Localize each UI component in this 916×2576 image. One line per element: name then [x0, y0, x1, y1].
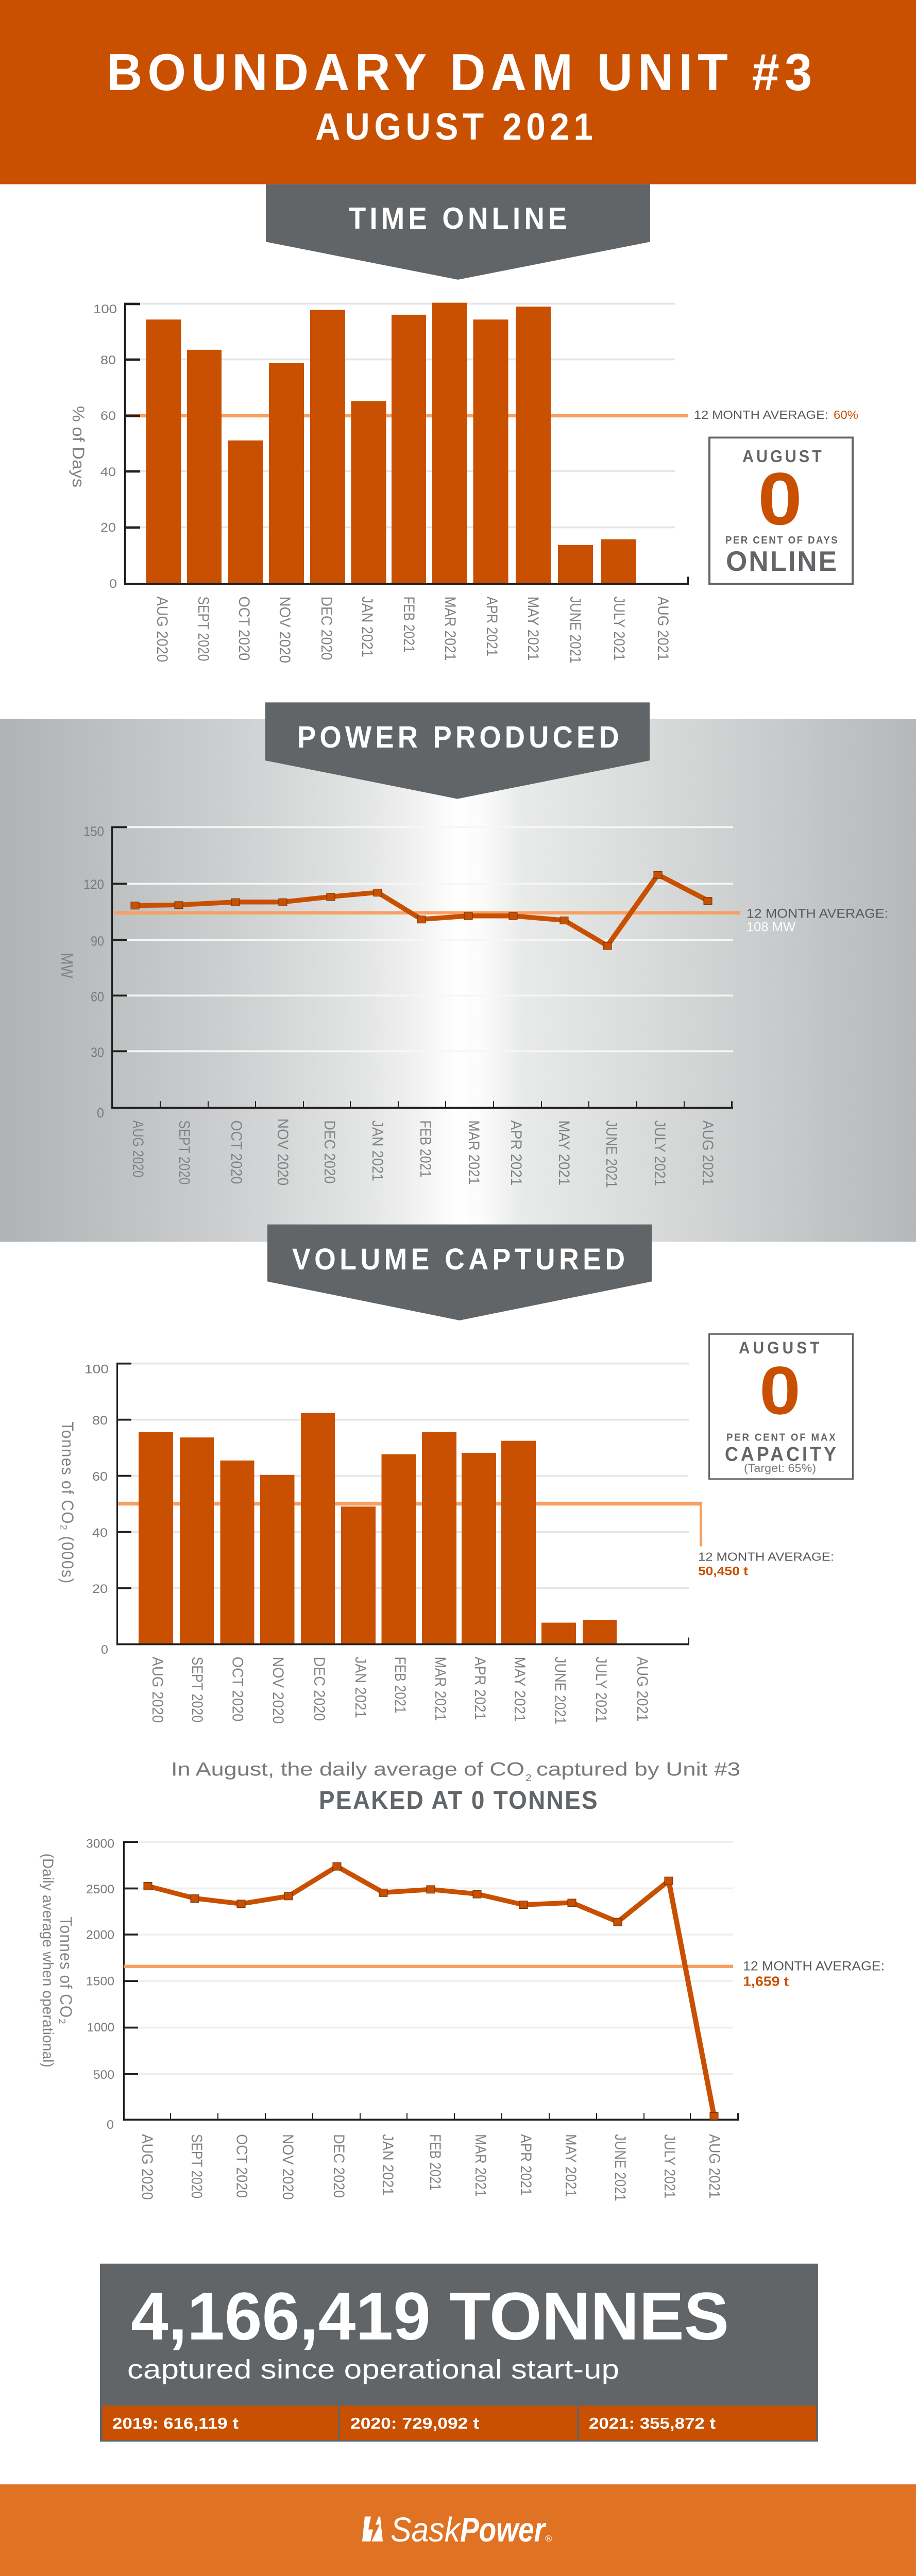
callout: august online: ONLINE: [726, 546, 837, 577]
x axis labels: SEPT 2020: [188, 2134, 205, 2198]
y axis labels: 100: [93, 302, 117, 316]
x axis labels: APR 2021: [517, 2134, 534, 2196]
header band: [0, 0, 916, 184]
callout: august capacity: 0: [759, 1353, 801, 1429]
x axis labels: JUNE 2021: [603, 1121, 620, 1188]
line chart: daily tonnes: [39, 1837, 739, 2201]
x axis labels: JULY 2021: [661, 2134, 678, 2198]
subtitle date: AUGUST 2021: [315, 105, 593, 148]
y axis labels: 60: [100, 409, 116, 423]
x axis labels: NOV 2020: [274, 1118, 291, 1185]
footer band: [0, 2484, 916, 2576]
panel: total tonnes captured: [100, 2264, 818, 2442]
y axis labels: 0: [97, 1106, 104, 1121]
average label: [743, 1959, 885, 1989]
average line: [117, 1502, 702, 1546]
panel: time online: [69, 184, 858, 664]
x axis labels: JAN 2021: [369, 1121, 386, 1181]
x axis labels: APR 2021: [483, 597, 500, 656]
panel: daily average: [39, 1759, 885, 2201]
intro sentence: 2: [525, 1773, 532, 1784]
y axis labels: 30: [91, 1045, 104, 1060]
average label: [698, 1550, 834, 1578]
callout: august capacity: CAPACITY: [725, 1443, 836, 1465]
average label: [747, 906, 888, 934]
average label: 12 MONTH AVERAGE:: [694, 409, 828, 422]
y axis labels: 0: [101, 1643, 108, 1657]
y axis title: Tonnes of CO₂: [57, 1917, 75, 2024]
x axis labels: SEPT 2020: [195, 597, 212, 661]
y axis labels: 2500: [86, 1883, 114, 1896]
x axis labels: JUNE 2021: [567, 597, 584, 664]
x axis labels: AUG 2020: [139, 2134, 156, 2200]
y axis labels: 500: [93, 2068, 114, 2082]
x axis labels: FEB 2021: [417, 1121, 434, 1177]
y axis labels: [84, 1362, 109, 1657]
x axis labels: OCT 2020: [229, 1657, 246, 1721]
heading banner: time online: [266, 184, 650, 280]
bars: [139, 1413, 617, 1644]
x axis labels: JAN 2021: [359, 597, 376, 657]
y axis labels: [83, 824, 104, 1121]
panel: power produced: [0, 702, 916, 1242]
x axis labels: AUG 2021: [654, 597, 671, 660]
average label: 12 MONTH AVERAGE:: [743, 1959, 885, 1974]
axes: [124, 303, 689, 585]
x axis labels: AUG 2020: [129, 1121, 146, 1177]
y axis title: [39, 1854, 75, 2067]
y axis labels: 40: [100, 465, 116, 479]
x axis labels: OCT 2020: [228, 1121, 245, 1184]
x axis labels: JULY 2021: [610, 597, 627, 660]
y axis labels: 2000: [86, 1928, 114, 1942]
y axis labels: 80: [100, 353, 116, 367]
heading banner: volume captured: VOLUME CAPTURED: [292, 1242, 625, 1276]
y axis labels: 3000: [86, 1837, 114, 1851]
x axis labels: OCT 2020: [233, 2134, 250, 2198]
panel: volume captured: [58, 1225, 853, 1724]
x axis labels: JULY 2021: [592, 1657, 609, 1722]
yearly cell: 2019: 2019: 616,119 t: [112, 2414, 239, 2432]
y axis title: (Daily average when operational): [39, 1854, 56, 2067]
bar chart: tonnes of CO2: [58, 1362, 702, 1724]
average line: [125, 414, 688, 417]
x axis labels: AUG 2020: [154, 597, 171, 662]
yearly cell: 2021: 2021: 355,872 t: [589, 2414, 716, 2432]
peak statement: PEAKED AT 0 TONNES: [319, 1786, 598, 1815]
x axis labels: JAN 2021: [379, 2134, 396, 2196]
logo wordmark: Power: [460, 2510, 547, 2549]
y axis labels: 90: [91, 934, 104, 948]
x axis labels: MAY 2021: [511, 1657, 528, 1722]
heading banner: time online: TIME ONLINE: [349, 201, 567, 236]
x axis labels: AUG 2021: [706, 2134, 723, 2198]
x axis labels: MAY 2021: [524, 597, 541, 660]
x axis labels: AUG 2020: [149, 1657, 166, 1723]
x axis labels: APR 2021: [471, 1657, 488, 1720]
x axis labels: SEPT 2020: [176, 1121, 193, 1184]
bars: [146, 303, 636, 583]
x axis labels: SEPT 2020: [189, 1657, 206, 1722]
y axis labels: [93, 302, 117, 591]
line chart: megawatts: [58, 824, 740, 1188]
yearly cell: 2020: [340, 2405, 577, 2440]
x axis labels: AUG 2021: [634, 1657, 651, 1721]
intro sentence: In August, the daily average of CO: [171, 1759, 524, 1780]
y axis labels: [86, 1837, 114, 2132]
total figure: 4,166,419 TONNES: [131, 2278, 729, 2354]
axes and ticks: [123, 1841, 739, 2121]
x axis labels: DEC 2020: [318, 597, 335, 660]
y axis labels: 60: [91, 989, 104, 1004]
y axis labels: 0: [107, 2118, 114, 2132]
data markers: [144, 1862, 718, 2120]
data line: [135, 875, 708, 946]
x axis labels: OCT 2020: [235, 597, 252, 660]
x axis labels: [139, 2134, 723, 2201]
y axis title: Tonnes of CO₂ (000s): [58, 1421, 77, 1583]
total caption: captured since operational start-up: [127, 2354, 619, 2384]
bar chart: per cent of days online: [69, 302, 689, 664]
y axis labels: 100: [84, 1362, 109, 1376]
x axis labels: JUNE 2021: [612, 2134, 629, 2201]
x axis labels: [129, 1118, 716, 1188]
y axis labels: 20: [92, 1582, 108, 1596]
x axis labels: MAY 2021: [562, 2134, 579, 2197]
callout: august online: PER CENT OF DAYS: [725, 534, 838, 546]
data markers: [131, 871, 712, 950]
x axis labels: FEB 2021: [427, 2134, 444, 2191]
x axis labels: MAR 2021: [472, 2134, 489, 2197]
average line: [124, 1965, 733, 1968]
data line: [148, 1867, 714, 2116]
callout: august capacity: PER CENT OF MAX: [726, 1432, 836, 1444]
x axis labels: [154, 597, 671, 664]
x axis labels: AUG 2021: [699, 1121, 716, 1185]
average label: 1,659 t: [743, 1974, 789, 1989]
average label: 12 MONTH AVERAGE:: [698, 1550, 834, 1564]
y axis labels: 40: [92, 1526, 108, 1540]
x axis labels: DEC 2020: [330, 2134, 347, 2198]
intro sentence: captured by Unit #3: [536, 1759, 740, 1780]
y axis labels: 150: [83, 824, 104, 839]
y axis labels: 80: [92, 1414, 108, 1428]
yearly cell: 2019: [102, 2405, 338, 2440]
x axis labels: MAY 2021: [555, 1121, 572, 1185]
average label: 108 MW: [747, 919, 795, 934]
x axis labels: NOV 2020: [269, 1657, 286, 1724]
intro sentence: [171, 1759, 740, 1784]
y axis labels: 0: [109, 577, 117, 591]
x axis labels: JAN 2021: [352, 1657, 369, 1718]
axes: [116, 1363, 689, 1645]
average label: 60%: [834, 409, 858, 422]
heading banner: volume captured: [267, 1225, 652, 1320]
x axis labels: FEB 2021: [392, 1657, 409, 1714]
x axis labels: JUNE 2021: [551, 1657, 568, 1724]
y axis title: % of Days: [69, 406, 88, 487]
heading banner: power produced: [265, 702, 650, 799]
callout: august capacity: (Target: 65%): [744, 1462, 816, 1475]
x axis labels: MAR 2021: [432, 1657, 449, 1721]
callout: august capacity: [709, 1334, 853, 1479]
x axis labels: NOV 2020: [279, 2134, 296, 2200]
x axis labels: MAR 2021: [465, 1121, 482, 1184]
x axis labels: JULY 2021: [651, 1121, 668, 1186]
yearly cell: 2021: [579, 2405, 816, 2440]
x axis labels: DEC 2020: [311, 1657, 328, 1721]
x axis labels: NOV 2020: [276, 597, 293, 663]
x axis labels: APR 2021: [507, 1121, 524, 1185]
x axis labels: MAR 2021: [442, 597, 459, 660]
y axis labels: 20: [100, 521, 116, 535]
x axis labels: DEC 2020: [321, 1121, 338, 1183]
callout: august online: [709, 437, 853, 584]
heading banner: power produced: POWER PRODUCED: [297, 720, 619, 755]
yearly cell: 2020: 2020: 729,092 t: [350, 2414, 479, 2432]
gradient background: [0, 719, 916, 1242]
title: BOUNDARY DAM UNIT #3: [107, 43, 812, 101]
x axis labels: FEB 2021: [400, 597, 417, 653]
y axis labels: 60: [92, 1470, 108, 1484]
logo wordmark: Sask: [391, 2510, 462, 2549]
y axis labels: 120: [83, 877, 104, 892]
y axis labels: 1500: [86, 1974, 114, 1988]
axes and ticks: [111, 826, 733, 1109]
y axis labels: 1000: [87, 2021, 114, 2035]
average label: 50,450 t: [698, 1564, 749, 1578]
average label: 12 MONTH AVERAGE:: [747, 906, 888, 921]
logo wordmark: [391, 2510, 552, 2549]
icon: saskpower logo mark: [362, 2517, 383, 2541]
callout: august online: AUGUST: [742, 447, 822, 466]
callout: august capacity: AUGUST: [739, 1338, 819, 1357]
y axis title: MW: [58, 953, 76, 979]
callout: august online: 0: [758, 457, 802, 540]
average line: [114, 911, 740, 914]
logo wordmark: ®: [545, 2534, 552, 2544]
x axis labels: [149, 1657, 651, 1724]
